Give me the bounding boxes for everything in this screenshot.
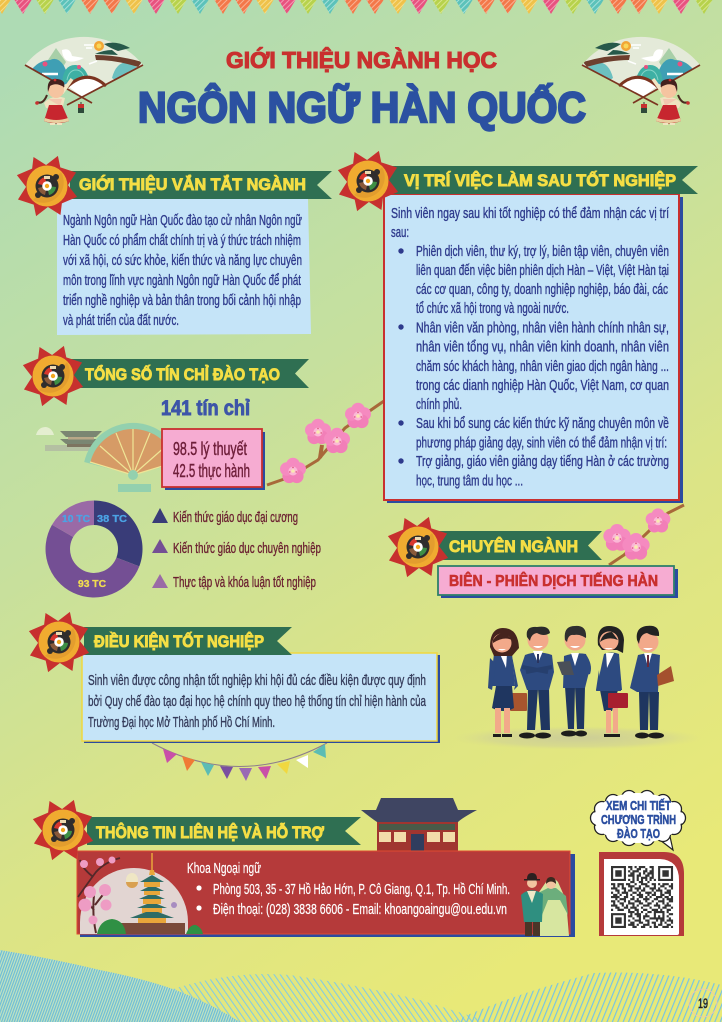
bunting under graduation panel	[152, 743, 327, 781]
section: total credits heading: TỔNG SỐ TÍN CHỈ ĐÀO TẠO	[85, 364, 280, 384]
section: total credits heading	[22, 345, 309, 407]
panel: short introduction: với xã hội, có sức khỏe, kiến thức và năng lực chuyên	[63, 253, 302, 269]
panel: short introduction	[16, 155, 332, 335]
panel: theory and practice credits	[162, 429, 265, 490]
chart legend	[152, 508, 321, 591]
panel: contact information: Khoa Ngoại ngữ	[187, 861, 261, 877]
illustration: pagoda scene	[78, 853, 203, 934]
donut chart: 93 TC	[78, 579, 106, 590]
chart legend: Thực tập và khóa luận tốt nghiệp	[173, 574, 316, 591]
blossom branch middle	[267, 401, 384, 485]
credits total: 141 tín chỉ	[161, 397, 250, 420]
section: specialization	[387, 516, 678, 598]
speech bubble: XEM CHI TIẾT	[606, 798, 671, 813]
top bunting	[0, 0, 712, 14]
illustration: five graduates	[452, 626, 702, 750]
section: specialization: BIÊN - PHIÊN DỊCH TIẾNG HÀN	[449, 572, 658, 590]
page number: 19	[698, 995, 708, 1011]
panel: theory and practice credits: 42.5 thực hành	[173, 461, 250, 481]
panel: contact information	[32, 799, 575, 937]
title: NGÔN NGỮ HÀN QUỐC	[138, 83, 586, 132]
panel: job positions	[337, 150, 698, 503]
donut chart: 10 TC	[62, 514, 90, 525]
illustration: roof building	[361, 798, 477, 852]
illustration: couple in hanbok	[521, 873, 569, 936]
title	[138, 46, 586, 132]
panel: graduation conditions: Trường Đại học Mở Thành phố Hồ Chí Minh.	[88, 715, 275, 731]
panel: contact information: Điện thoại: (028) 3838 6606 - Email: khoangoaingu@ou.edu.vn	[213, 902, 507, 918]
speech bubble	[590, 790, 686, 850]
panel: short introduction: Ngành Ngôn ngữ Hàn Quốc đào tạo cử nhân Ngôn ngữ	[63, 213, 302, 229]
speech bubble: ĐÀO TẠO	[617, 826, 660, 841]
illustration: palace and fan	[36, 423, 182, 492]
section: specialization: CHUYÊN NGÀNH	[449, 537, 578, 556]
panel: short introduction: GIỚI THIỆU VẮN TẮT NGÀNH	[79, 175, 306, 194]
panel: contact information: THÔNG TIN LIÊN HỆ VÀ HỖ TRỢ	[96, 823, 325, 842]
donut chart	[46, 500, 143, 598]
chart legend: Kiến thức giáo dục chuyên nghiệp	[173, 540, 321, 557]
panel: graduation conditions: Sinh viên được công nhận tốt nghiệp khi hội đủ các điều kiện được quy định	[88, 673, 426, 689]
donut chart: 38 TC	[97, 514, 127, 525]
panel: short introduction: môn trong lĩnh vực ngành Ngôn ngữ Hàn Quốc để phát	[63, 273, 301, 289]
title: GIỚI THIỆU NGÀNH HỌC	[226, 46, 497, 73]
speech bubble: CHƯƠNG TRÌNH	[601, 812, 676, 827]
panel: graduation conditions	[28, 611, 440, 743]
blossom branch right	[603, 505, 684, 565]
illustration: fan and girl right	[582, 37, 700, 125]
bottom wave pattern	[0, 950, 722, 1024]
panel: short introduction: Hàn Quốc có phẩm chất chính trị và ý thức trách nhiệm	[63, 233, 301, 249]
panel: theory and practice credits: 98.5 lý thuyết	[173, 439, 247, 459]
panel: short introduction: và phát triển của đất nước.	[63, 313, 179, 329]
panel: job positions: VỊ TRÍ VIỆC LÀM SAU TỐT NGHIỆP	[404, 170, 676, 190]
panel: job positions: sau:	[391, 225, 409, 241]
panel: graduation conditions: bởi Quy chế đào tạo đại học hệ chính quy theo hệ thống tín chỉ hiện hành của	[88, 694, 427, 710]
page number	[689, 989, 717, 1017]
illustration: fan and girl left	[25, 37, 143, 125]
QR code	[599, 852, 684, 936]
chart legend: Kiến thức giáo dục đại cương	[173, 509, 298, 526]
panel: contact information: Phòng 503, 35 - 37 Hồ Hảo Hớn, P. Cô Giang, Q.1, Tp. Hồ Chí Minh.	[213, 882, 510, 898]
panel: job positions: học, trung tâm du học ...	[416, 474, 523, 490]
panel: job positions: tổ chức xã hội trong và ngoài nước.	[416, 301, 569, 317]
panel: short introduction: triển nghề nghiệp và bản thân trong bối cảnh hội nhập	[63, 293, 301, 309]
panel: job positions: chính phủ.	[416, 397, 462, 413]
panel: graduation conditions: ĐIỀU KIỆN TỐT NGHIỆP	[94, 631, 264, 651]
